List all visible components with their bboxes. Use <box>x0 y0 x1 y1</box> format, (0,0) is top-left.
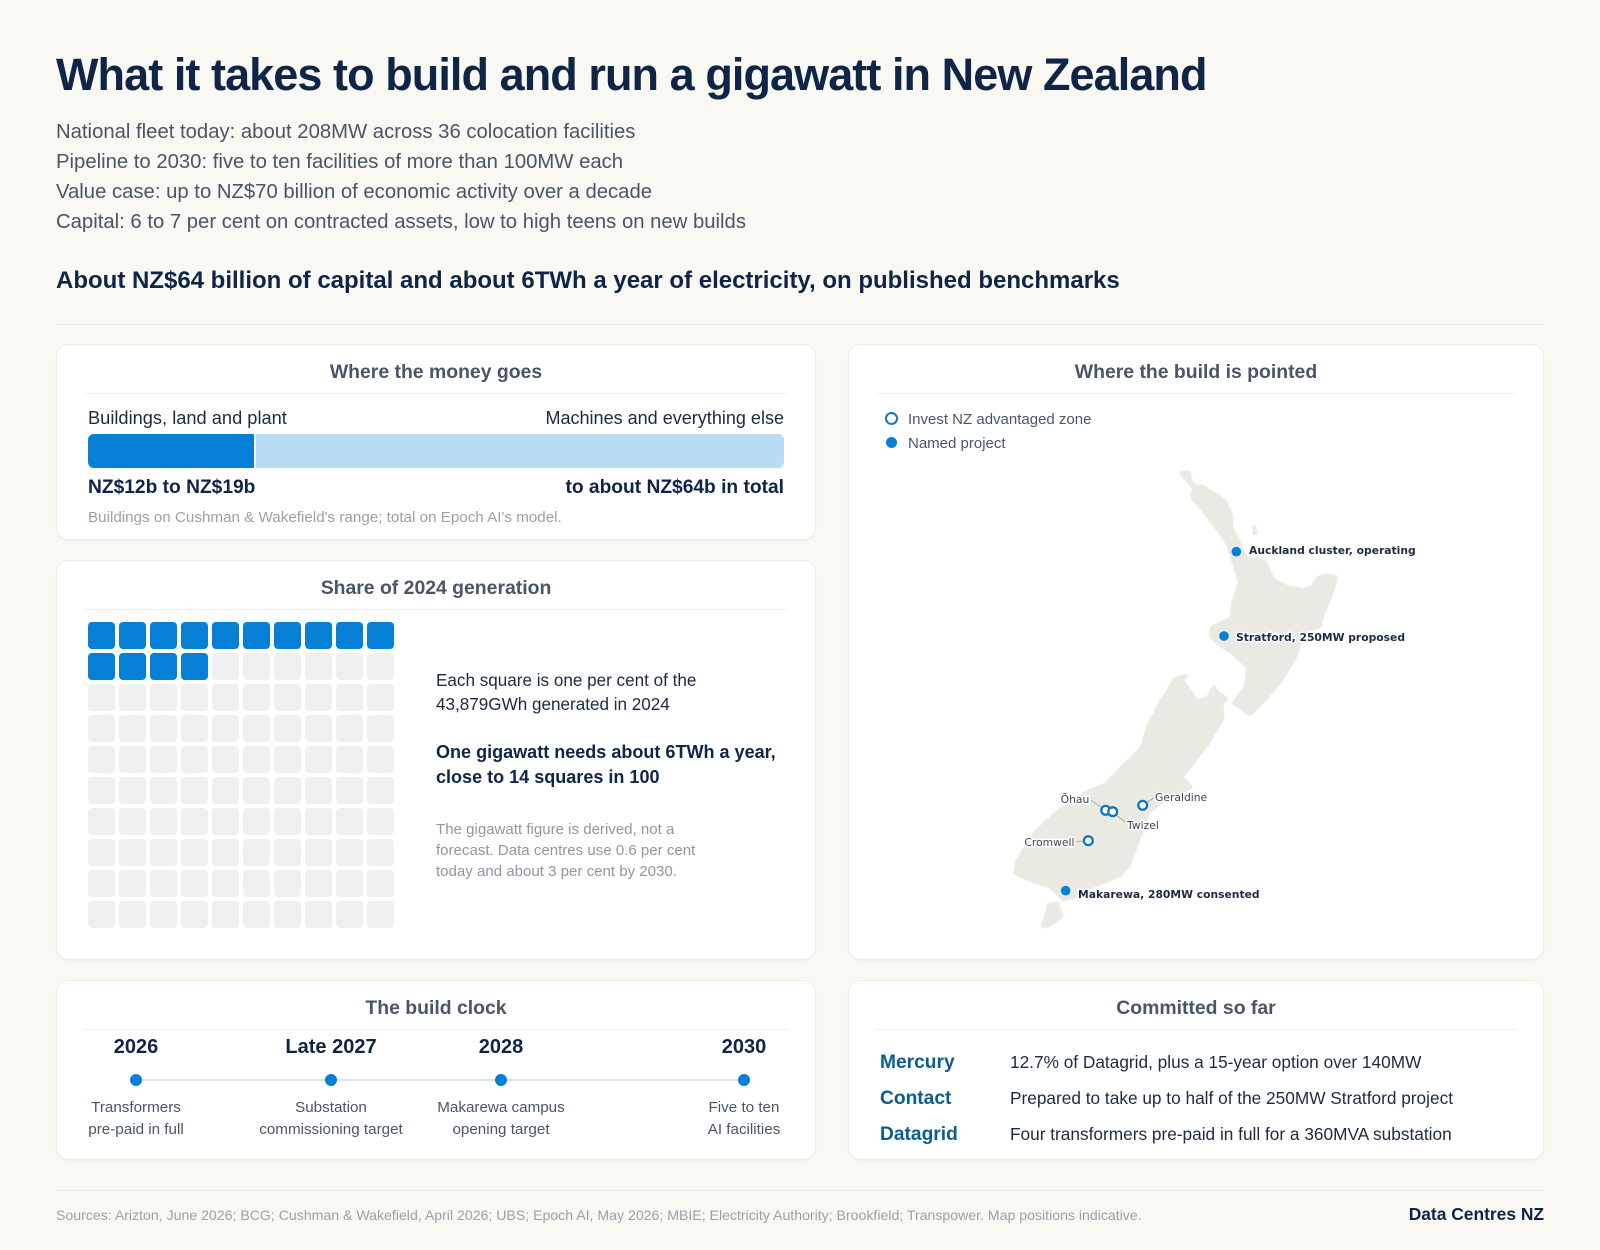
waffle note: forecast. Data centres use 0.6 per cent <box>436 842 695 859</box>
row: Datagrid: Four transformers pre-paid in full for a 360MVA substation <box>1010 1124 1452 1144</box>
heading: build clock: The build clock <box>365 997 507 1019</box>
row: Mercury: 12.7% of Datagrid, plus a 15-year option over 140MW <box>1010 1052 1421 1072</box>
row: Contact: Contact <box>880 1088 951 1109</box>
panel: where the money goes <box>56 344 816 540</box>
land: North Island <box>1179 471 1337 716</box>
map of New Zealand <box>1014 470 1416 928</box>
milestone: 2026: pre-paid in full <box>88 1121 184 1138</box>
heading: map: Where the build is pointed <box>1075 361 1317 383</box>
milestone: 2030: AI facilities <box>708 1121 780 1138</box>
marker: Twizel <box>1108 807 1159 832</box>
map legend <box>885 411 1091 452</box>
marker: Geraldine: Geraldine <box>1155 791 1208 804</box>
milestone: 2030: Five to ten <box>709 1099 779 1116</box>
sources: Sources: Arizton, June 2026; BCG; Cushman & Wakefield, April 2026; UBS; Epoch AI, May 2026; MBIE; Electricity Authority; Brookfield; Transpower. Map positions indicative. <box>56 1207 1142 1223</box>
waffle explanation: Each square is one per cent of the <box>436 671 696 690</box>
milestone: 2028: Makarewa campus <box>437 1099 565 1116</box>
milestone: late 2027: commissioning target <box>259 1121 403 1138</box>
milestone: late 2027 <box>259 1036 403 1138</box>
heading: share of generation: Share of 2024 generation <box>321 577 551 599</box>
panel: the build clock <box>56 980 816 1160</box>
subtitle facts: Pipeline to 2030: five to ten facilities of more than 100MW each <box>56 151 623 173</box>
waffle explanation: 43,879GWh generated in 2024 <box>436 695 670 714</box>
land: Great Barrier Island <box>1252 525 1258 535</box>
waffle key finding: close to 14 squares in 100 <box>436 766 660 786</box>
panel: where the build is pointed <box>848 344 1544 960</box>
milestone: 2030 <box>708 1036 780 1138</box>
brand: Data Centres NZ <box>1409 1204 1544 1224</box>
headline finding: About NZ$64 billion of capital and about 6TWh a year of electricity, on published benchmarks <box>56 266 1120 294</box>
marker: Ōhau: Ōhau <box>1061 793 1089 806</box>
subtitle facts: Capital: 6 to 7 per cent on contracted assets, low to high teens on new builds <box>56 211 746 233</box>
milestone: 2028: opening target <box>452 1121 550 1138</box>
milestone: 2026: Transformers <box>91 1099 181 1116</box>
waffle note: today and about 3 per cent by 2030. <box>436 863 677 880</box>
milestone: late 2027: Substation <box>295 1099 367 1116</box>
subtitle facts <box>56 121 746 233</box>
label: buildings: Buildings, land and plant <box>88 407 287 428</box>
bar note: Buildings on Cushman & Wakefield's range; total on Epoch AI's model. <box>88 509 562 526</box>
value: total: to about NZ$64b in total <box>565 477 784 498</box>
title: What it takes to build and run a gigawatt in New Zealand <box>56 49 1207 100</box>
waffle note <box>436 821 696 880</box>
panel: committed so far <box>848 980 1544 1160</box>
milestone: 2026 <box>88 1036 184 1138</box>
waffle key finding: One gigawatt needs about 6TWh a year, <box>436 742 776 762</box>
milestone: 2026: 2026 <box>114 1036 158 1058</box>
milestone: 2028 <box>437 1036 565 1138</box>
waffle chart <box>88 622 394 928</box>
label: machines: Machines and everything else <box>545 408 784 428</box>
milestone: 2028: 2028 <box>479 1036 523 1058</box>
milestone: late 2027: Late 2027 <box>285 1036 377 1058</box>
legend: advantaged zone: Invest NZ advantaged zone <box>908 411 1091 428</box>
marker: Auckland: Auckland cluster, operating <box>1249 544 1416 557</box>
heading: committed: Committed so far <box>1116 997 1276 1019</box>
panel: share of 2024 generation <box>56 560 816 960</box>
waffle key finding <box>436 742 776 787</box>
stacked bar <box>88 434 784 468</box>
subtitle facts: National fleet today: about 208MW across 36 colocation facilities <box>56 121 635 143</box>
marker: Twizel: Twizel <box>1126 819 1159 832</box>
row: Datagrid: Datagrid <box>880 1124 958 1145</box>
value: buildings: NZ$12b to NZ$19b <box>88 477 255 498</box>
legend: named project: Named project <box>908 435 1006 452</box>
row: Contact: Prepared to take up to half of the 250MW Stratford project <box>1010 1088 1453 1108</box>
row: Mercury: Mercury <box>880 1052 955 1073</box>
marker: Ōhau <box>1061 793 1110 815</box>
marker: Stratford: Stratford, 250MW proposed <box>1236 631 1405 644</box>
heading: where the money goes: Where the money goes <box>330 361 542 383</box>
timeline line <box>136 1079 744 1081</box>
subtitle facts: Value case: up to NZ$70 billion of economic activity over a decade <box>56 181 652 203</box>
waffle explanation <box>436 671 696 714</box>
marker: Geraldine <box>1138 791 1208 810</box>
marker: Makarewa: Makarewa, 280MW consented <box>1078 888 1260 901</box>
land: South Island <box>1014 675 1228 901</box>
marker: Cromwell: Cromwell <box>1024 836 1074 849</box>
milestone: 2030: 2030 <box>722 1036 766 1058</box>
waffle note: The gigawatt figure is derived, not a <box>436 821 674 838</box>
land: Stewart Island <box>1041 902 1063 928</box>
